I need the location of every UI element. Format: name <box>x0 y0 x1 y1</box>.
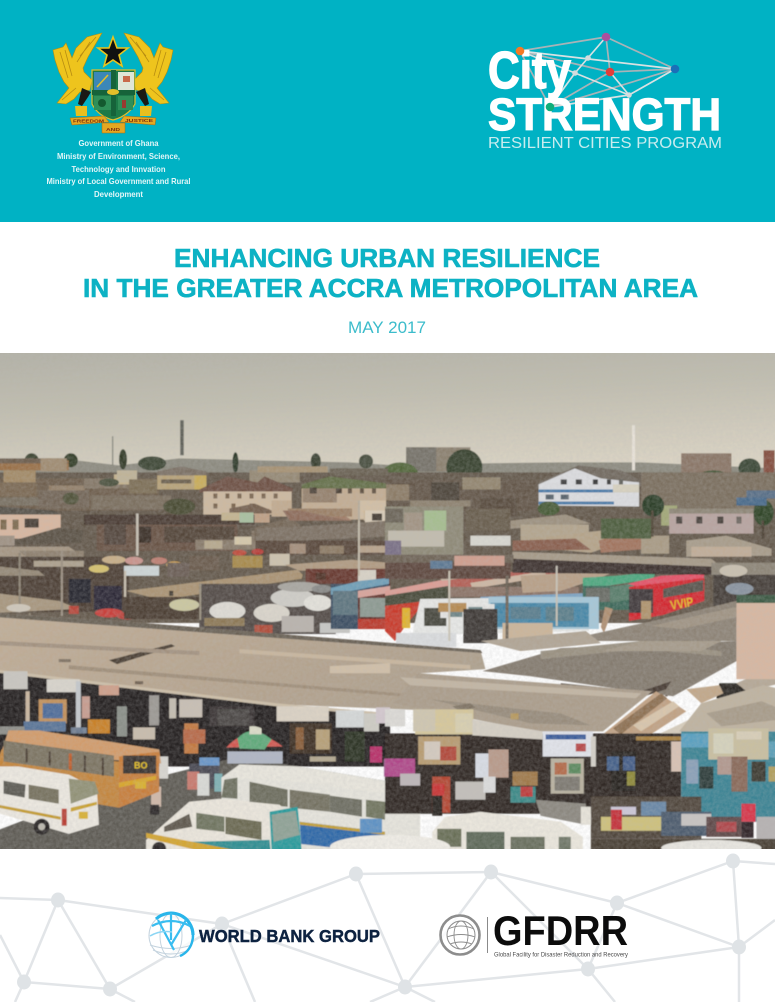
shield <box>92 70 135 120</box>
wordmark: City: City <box>488 42 571 100</box>
central roof <box>393 673 652 731</box>
parked cars <box>199 582 350 634</box>
building: market hall centre-left <box>84 500 360 561</box>
pink wall block right <box>736 603 775 679</box>
text: government ministries: Development <box>94 189 143 199</box>
building: pink with windows <box>669 509 756 534</box>
ribbon: and: AND <box>106 127 121 132</box>
text: government ministries: Ministry of Environment, Science, <box>57 151 180 161</box>
umbrella <box>226 726 283 764</box>
photo: Accra market and bus station <box>0 353 775 849</box>
shed maroon block <box>285 560 390 586</box>
poles <box>29 521 668 703</box>
right eagle <box>124 33 173 104</box>
text: government ministries <box>46 138 190 199</box>
feet and scroll caps <box>75 106 152 116</box>
title: ENHANCING URBAN RESILIENCE <box>174 245 600 273</box>
storefronts centre right <box>385 709 686 825</box>
buses centre <box>440 572 610 599</box>
title <box>83 245 698 303</box>
buses centre left <box>331 578 448 641</box>
wordmark: STRENGTH: STRENGTH <box>488 89 721 140</box>
big front roof left <box>0 614 486 710</box>
building: mid row houses <box>229 504 390 541</box>
logo: World Bank Group <box>149 913 380 958</box>
star <box>98 37 128 66</box>
storefronts left <box>0 669 390 777</box>
logo: City Strength <box>488 33 722 152</box>
shoppers <box>150 757 222 815</box>
subtitle: Global Facility for Disaster Reduction and Recovery <box>494 952 629 958</box>
network nodes <box>17 854 746 996</box>
town base <box>0 472 775 623</box>
orange bus: BO <box>134 761 148 771</box>
long canopy and stalls <box>385 552 775 609</box>
market goods right <box>432 784 775 859</box>
logo network <box>520 37 675 107</box>
building: green roof <box>302 476 388 521</box>
building: grey sheds centre <box>255 509 388 555</box>
hillside buildings <box>0 0 388 510</box>
street <box>0 759 382 849</box>
text: government ministries: Ministry of Local Government and Rural <box>46 176 190 186</box>
colourful wall centre <box>385 507 511 555</box>
orange bus <box>0 730 161 808</box>
bus: white and blue <box>396 597 613 647</box>
logo: GFDRR <box>440 907 629 958</box>
sky <box>0 353 775 468</box>
awning and right roof <box>604 684 775 734</box>
blue wall and hanging clothes <box>681 728 775 822</box>
globe <box>440 916 480 954</box>
wordmark: GFDRR <box>493 907 628 954</box>
building: pink left house <box>0 507 84 546</box>
wordmark: WORLD BANK GROUP <box>199 926 380 946</box>
white minibus bottom right <box>330 812 762 862</box>
footer network pattern <box>0 854 775 1002</box>
low gable houses <box>511 506 772 557</box>
ribbon: justice: JUSTICE <box>125 118 153 123</box>
grey roofs right <box>480 601 775 704</box>
text: government ministries: Government of Ghana <box>78 138 159 148</box>
palms <box>63 490 775 539</box>
logo nodes <box>516 33 679 111</box>
globe <box>149 913 193 958</box>
long shed roof <box>124 570 303 619</box>
long white and blue bus <box>221 765 420 851</box>
header band <box>0 0 775 222</box>
building: white house with blue stripe <box>539 465 641 507</box>
divider <box>487 917 488 953</box>
building: tan multi-storey <box>199 476 293 517</box>
date: MAY 2017 <box>348 318 426 337</box>
left eagle <box>53 33 102 104</box>
eagle legs <box>78 88 149 106</box>
tagline: RESILIENT CITIES PROGRAM <box>488 135 722 152</box>
teal minibus <box>145 798 302 849</box>
sheds left with umbrellas <box>0 547 290 619</box>
bus: red VVIP: VVIP <box>669 594 695 613</box>
distant skyline <box>0 420 775 474</box>
title: IN THE GREATER ACCRA METROPOLITAN AREA <box>83 275 698 303</box>
bus: green <box>583 572 656 610</box>
network lines <box>0 861 775 1002</box>
white minibus left <box>0 767 99 835</box>
logo: Ghana coat of arms <box>53 33 173 133</box>
bus: red VVIP <box>628 574 704 621</box>
ribbon: freedom: FREEDOM <box>73 118 104 124</box>
text: government ministries: Technology and Innvation <box>72 164 166 174</box>
